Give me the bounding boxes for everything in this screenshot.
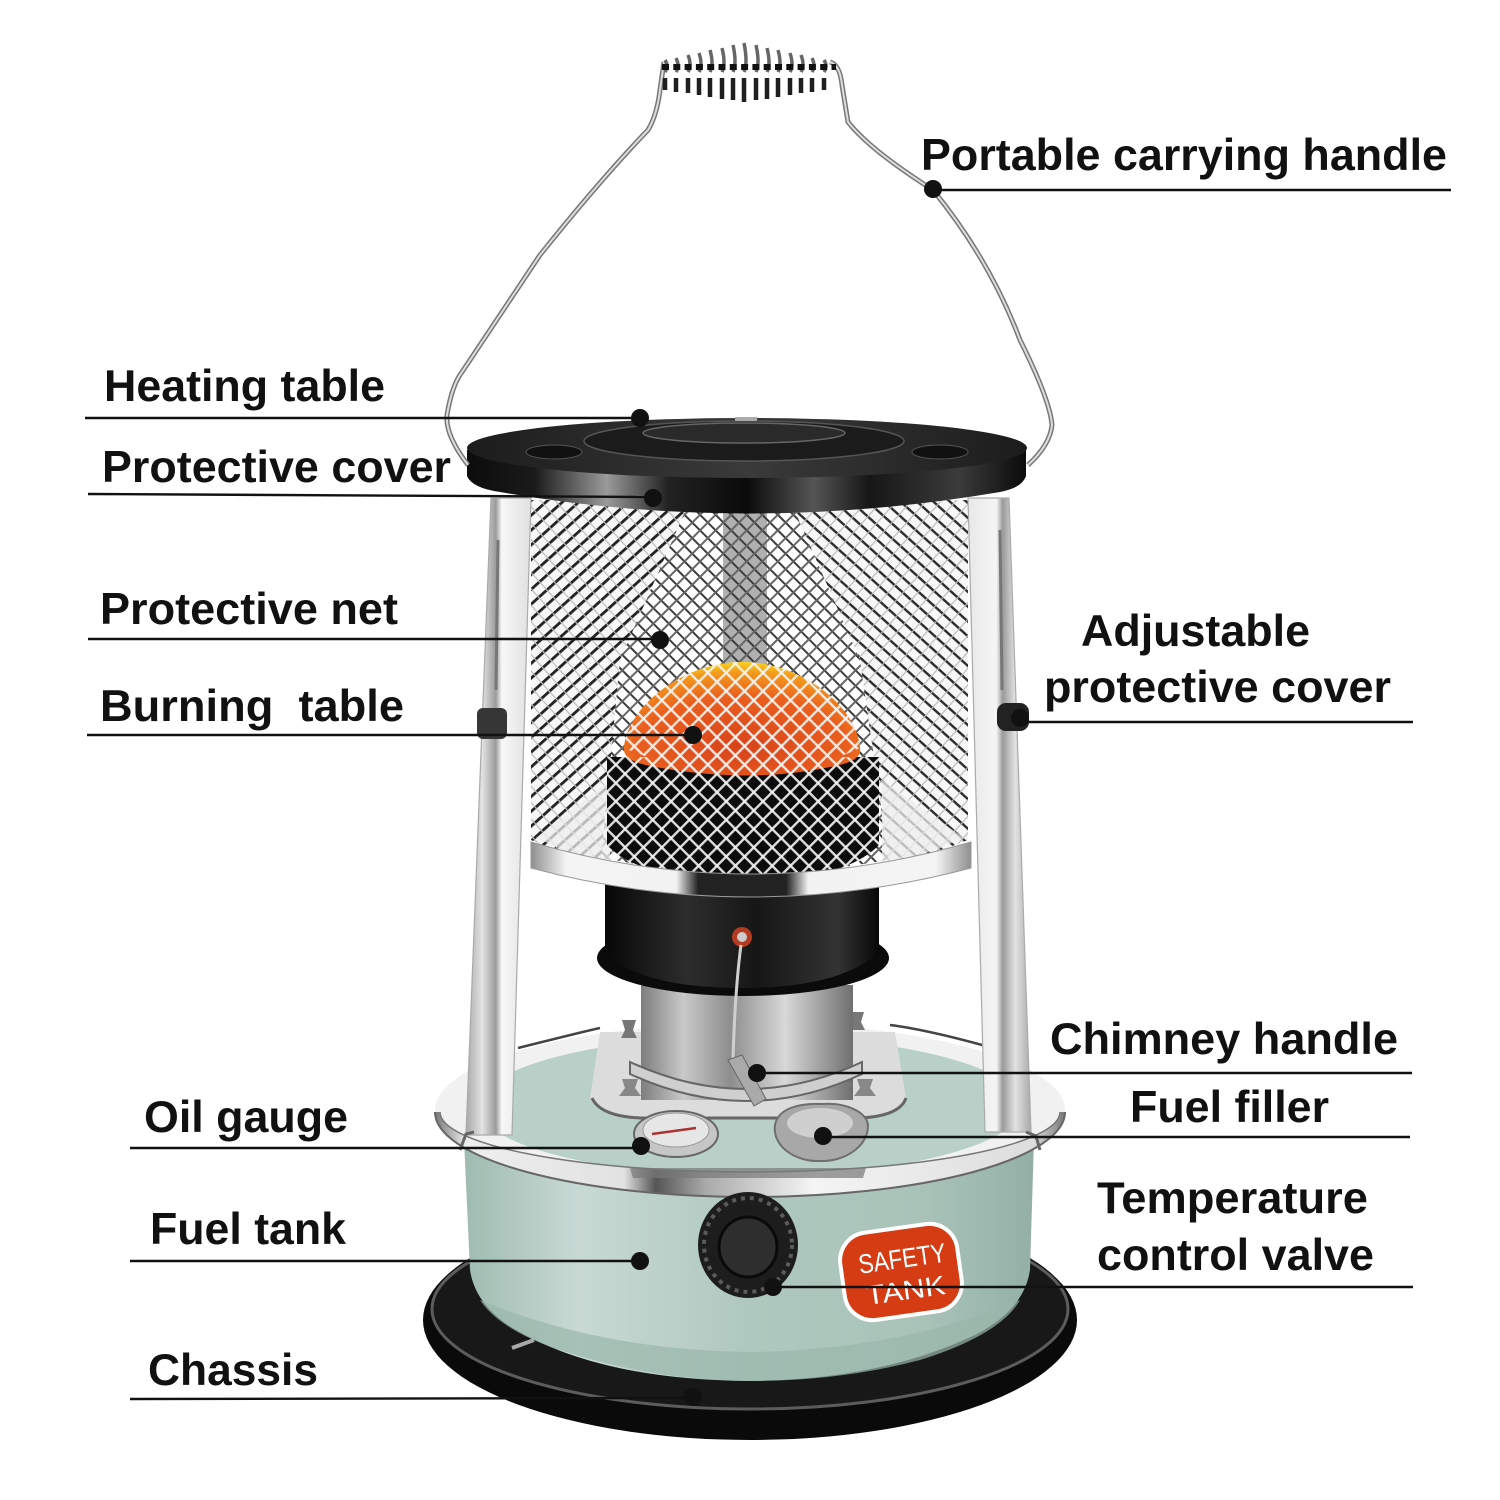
- left leg: [460, 498, 531, 1150]
- label: temperature control valve: [764, 1174, 1413, 1296]
- safety tank badge: SAFETY: [857, 1238, 948, 1280]
- safety tank badge: [836, 1220, 966, 1324]
- label: protective net: Protective net: [100, 585, 398, 634]
- handle spring: [662, 43, 836, 102]
- label: oil gauge: Oil gauge: [144, 1093, 348, 1142]
- label: burning table: Burning table: [100, 682, 404, 731]
- label: protective net: [88, 585, 669, 649]
- heater product illustration: [423, 43, 1077, 1440]
- label: fuel filler: Fuel filler: [1130, 1083, 1329, 1132]
- label: protective cover: Protective cover: [102, 443, 451, 492]
- left adjustment knob: [477, 708, 507, 739]
- label: heating table: Heating table: [104, 362, 385, 411]
- label: adjustable protective cover: protective cover: [1044, 663, 1391, 712]
- protective net: [531, 500, 970, 905]
- temperature control knob: [698, 1192, 798, 1298]
- label: chassis: Chassis: [148, 1346, 318, 1395]
- fuel filler cap: [775, 1104, 868, 1161]
- burning table: [607, 662, 879, 882]
- silver chimney cylinder: [630, 985, 862, 1101]
- burner base plate: [590, 1012, 906, 1118]
- safety tank badge: TANK: [864, 1270, 947, 1311]
- fuel tank: [464, 1140, 1034, 1381]
- label: adjustable protective cover: [1011, 607, 1413, 727]
- label: chimney handle: [748, 1015, 1412, 1082]
- label: temperature control valve: control valve: [1097, 1231, 1374, 1280]
- label: chassis: [130, 1346, 702, 1406]
- chassis tray: [423, 1200, 1077, 1440]
- label: oil gauge: [130, 1093, 650, 1155]
- label: temperature control valve: Temperature: [1097, 1174, 1368, 1223]
- label: burning table: [87, 682, 702, 744]
- label: protective cover: [88, 443, 662, 507]
- right adjustment knob: [997, 703, 1029, 731]
- label: fuel filler: [814, 1083, 1410, 1145]
- right leg: [968, 498, 1040, 1150]
- tray ring: [531, 842, 971, 897]
- label: heating table: [85, 362, 649, 427]
- tank rim and top: [435, 1023, 1065, 1197]
- label: portable carrying handle: Portable carrying handle: [921, 131, 1447, 180]
- label: fuel tank: [130, 1205, 649, 1270]
- black burner chamber: [597, 870, 889, 996]
- heater top cover: [467, 418, 1027, 514]
- lower net glare: [536, 780, 964, 870]
- carrying handle: [447, 43, 1052, 465]
- label: adjustable protective cover: Adjustable: [1081, 607, 1310, 656]
- label: chimney handle: Chimney handle: [1050, 1015, 1398, 1064]
- inner column: [723, 505, 767, 675]
- label: fuel tank: Fuel tank: [150, 1205, 346, 1254]
- chimney handle: [728, 927, 766, 1106]
- oil gauge: [634, 1111, 718, 1157]
